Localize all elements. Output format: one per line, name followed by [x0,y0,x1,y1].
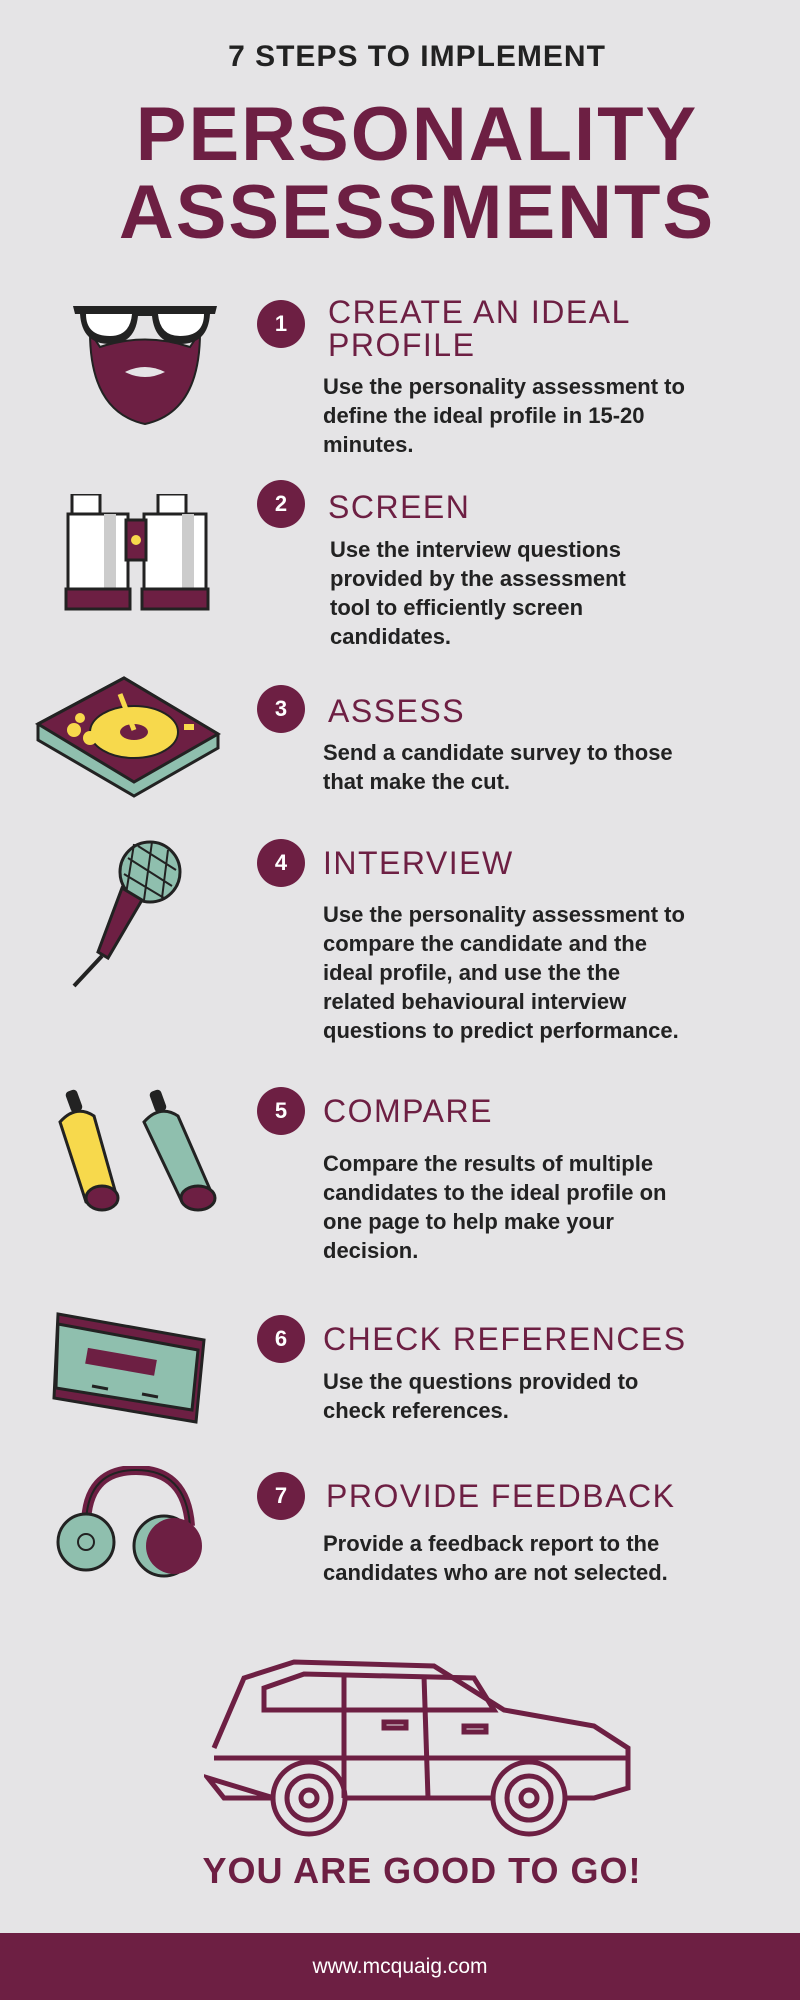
text 2: tool to efficiently screen [330,595,583,620]
step 3 [257,685,673,794]
heading 1 [328,294,631,363]
icon: bottles [58,1090,216,1212]
subtitle: 7 STEPS TO IMPLEMENT [228,40,606,73]
text 7 [323,1531,668,1585]
number 2 [257,480,305,528]
text 7: candidates who are not selected. [323,1560,668,1585]
text 2: Use the interview questions [330,537,621,562]
text 3: that make the cut. [323,769,510,794]
text 1: Use the personality assessment to [323,374,685,399]
text 3 [323,740,673,794]
footer [0,1933,800,2000]
number 1: 1 [275,311,287,336]
icon: headphones [56,1466,202,1578]
heading 7: PROVIDE FEEDBACK [326,1478,675,1514]
text 5: candidates to the ideal profile on [323,1180,666,1205]
text 2: candidates. [330,624,451,649]
text 1: minutes. [323,432,413,457]
text 2 [330,537,626,649]
icon: microphone [72,840,182,988]
number 3 [257,685,305,733]
text 4: questions to predict performance. [323,1018,679,1043]
heading 3: ASSESS [328,693,465,729]
number 5: 5 [275,1098,287,1123]
number 3: 3 [275,696,287,721]
text 4: ideal profile, and use the the [323,960,620,985]
heading 5: COMPARE [323,1093,493,1129]
icon: glasses and beard [73,306,217,425]
heading 1: PROFILE [328,327,475,363]
heading 4: INTERVIEW [323,845,514,881]
text 4: Use the personality assessment to [323,902,685,927]
illustration: car [204,1660,630,1836]
title: PERSONALITY [136,92,698,177]
closing message: YOU ARE GOOD TO GO! [202,1850,642,1891]
text 2: provided by the assessment [330,566,626,591]
text 4: compare the candidate and the [323,931,647,956]
heading 6: CHECK REFERENCES [323,1321,687,1357]
number 1 [257,300,305,348]
text 5 [323,1151,666,1263]
title [119,92,715,255]
step 5 [257,1087,666,1263]
step 4 [257,839,685,1043]
icon: turntable [35,676,221,798]
heading 1: CREATE AN IDEAL [328,294,631,330]
number 6: 6 [275,1326,287,1351]
heading 2: SCREEN [328,489,470,525]
number 6 [257,1315,305,1363]
icon: cassette [52,1312,206,1424]
step 6 [257,1315,687,1423]
text 1 [323,374,685,457]
number 4 [257,839,305,887]
text 4: related behavioural interview [323,989,626,1014]
number 5 [257,1087,305,1135]
step 1 [257,294,685,457]
icon: binoculars [64,494,210,610]
text 3: Send a candidate survey to those [323,740,673,765]
text 6: Use the questions provided to [323,1369,638,1394]
text 6 [323,1369,638,1423]
text 5: decision. [323,1238,418,1263]
number 7: 7 [275,1483,287,1508]
number 2: 2 [275,491,287,516]
step 7 [257,1472,675,1585]
number 7 [257,1472,305,1520]
text 1: define the ideal profile in 15-20 [323,403,645,428]
step 2 [257,480,626,649]
footer: www.mcquaig.com [312,1955,488,1978]
text 6: check references. [323,1398,509,1423]
text 7: Provide a feedback report to the [323,1531,659,1556]
text 4 [323,902,685,1043]
title: ASSESSMENTS [119,170,715,255]
text 5: Compare the results of multiple [323,1151,653,1176]
number 4: 4 [275,850,287,875]
text 5: one page to help make your [323,1209,614,1234]
